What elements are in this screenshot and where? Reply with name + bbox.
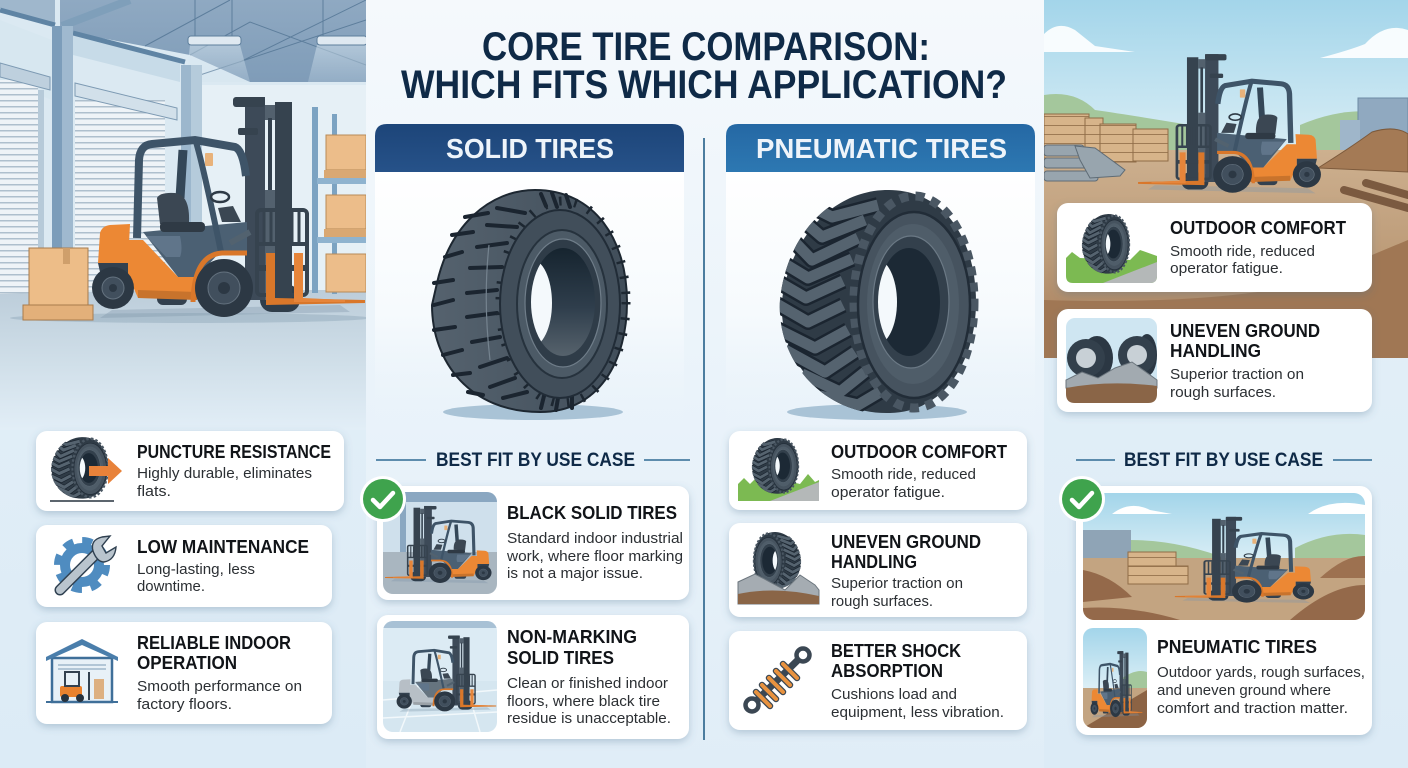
icon: shock absorber	[746, 648, 810, 712]
card: uneven ground handling, scene	[1057, 309, 1372, 412]
warehouse scene with forklift	[0, 0, 370, 430]
panel: pneumatic tires	[726, 124, 1035, 430]
card: low maintenance: downtime.	[137, 578, 205, 595]
icon: tire on rocks	[738, 532, 819, 604]
card: reliable indoor operation: factory floors.	[137, 696, 232, 713]
card: better shock absorption: equipment, less vibration.	[831, 704, 1004, 721]
heading: best fit, pneumatic: BEST FIT BY USE CASE	[1124, 450, 1323, 471]
card: black solid tires: is not a major issue.	[507, 565, 643, 582]
title	[401, 25, 1007, 107]
card: outdoor comfort: Smooth ride, reduced	[831, 466, 976, 483]
cardboard box on pallet	[23, 248, 93, 320]
card: outdoor comfort: operator fatigue.	[831, 484, 945, 501]
heading: pneumatic tires: PNEUMATIC TIRES	[756, 133, 1007, 164]
icon: check badge, pneumatic	[1059, 476, 1105, 522]
card: outdoor comfort	[729, 431, 1027, 510]
card: better shock absorption: Cushions load and	[831, 686, 957, 703]
logs	[1344, 183, 1408, 208]
card: pneumatic tires use case: and uneven ground where	[1157, 682, 1331, 699]
card: pneumatic tires use case: PNEUMATIC TIRES	[1157, 637, 1317, 657]
card: non-marking solid tires: Clean or finished indoor	[507, 675, 668, 692]
card: outdoor comfort, scene: OUTDOOR COMFORT	[1170, 218, 1346, 238]
card: better shock absorption	[729, 631, 1027, 730]
outdoor yard scene with forklift	[1044, 0, 1408, 358]
card: black solid tires	[377, 486, 689, 600]
card: outdoor comfort, scene	[1057, 203, 1372, 292]
card: uneven ground handling: UNEVEN GROUND	[831, 532, 981, 552]
card: black solid tires: Standard indoor industrial	[507, 530, 683, 547]
card: outdoor comfort: OUTDOOR COMFORT	[831, 442, 1007, 462]
card: reliable indoor operation	[36, 622, 332, 724]
heading: solid tires: SOLID TIRES	[446, 133, 614, 164]
card: uneven ground handling: Superior traction on	[831, 575, 963, 592]
card: black solid tires: BLACK SOLID TIRES	[507, 503, 677, 523]
forklift: yard	[1138, 54, 1321, 193]
pneumatic tire illustration	[775, 190, 976, 413]
panel: solid tires	[375, 124, 684, 430]
icon: check badge, solid	[360, 476, 406, 522]
card: uneven ground handling, scene: Superior traction on	[1170, 366, 1304, 383]
card: non-marking solid tires: floors, where black tire	[507, 693, 660, 710]
stacked lumber	[1044, 114, 1168, 162]
card: reliable indoor operation: RELIABLE INDOOR	[137, 633, 291, 653]
card: pneumatic tires use case	[1076, 486, 1372, 735]
card: black solid tires: work, where floor marking	[506, 548, 683, 565]
heading: pneumatic tires	[726, 124, 1035, 172]
icon: wheels on rocks	[1066, 318, 1157, 403]
forklift: warehouse	[92, 97, 365, 318]
solid tire illustration	[432, 190, 627, 412]
icon: warehouse with forklift	[46, 639, 118, 702]
card: non-marking solid tires: NON-MARKING	[507, 627, 637, 647]
thumbnail: forklift on dirt	[1083, 628, 1147, 728]
title: WHICH FITS WHICH APPLICATION?	[401, 63, 1007, 107]
card: pneumatic tires use case: comfort and traction matter.	[1157, 700, 1348, 717]
card: outdoor comfort, scene: operator fatigue.	[1170, 260, 1283, 277]
card: uneven ground handling, scene: UNEVEN GROUND	[1170, 321, 1320, 341]
card: uneven ground handling, scene: rough surfaces.	[1170, 384, 1276, 401]
card: uneven ground handling: rough surfaces.	[831, 593, 933, 610]
card: non-marking solid tires: SOLID TIRES	[507, 648, 614, 668]
card: reliable indoor operation: OPERATION	[137, 653, 237, 673]
card: pneumatic tires use case: Outdoor yards, rough surfaces,	[1157, 664, 1365, 681]
card: outdoor comfort, scene: Smooth ride, reduced	[1170, 243, 1315, 260]
card: puncture resistance: Highly durable, eliminates	[137, 465, 312, 482]
card: uneven ground handling: HANDLING	[831, 552, 917, 572]
card: uneven ground handling, scene: HANDLING	[1170, 341, 1261, 361]
heading: best fit, solid: BEST FIT BY USE CASE	[436, 450, 635, 471]
card: low maintenance: LOW MAINTENANCE	[137, 537, 309, 557]
icon: tire on grass	[1066, 214, 1157, 283]
card: puncture resistance	[36, 431, 344, 511]
icon: gear and wrench	[58, 536, 116, 590]
card: reliable indoor operation: Smooth performance on	[137, 678, 302, 695]
thumbnail: clean-floor forklift	[383, 621, 497, 732]
dirt mound	[1318, 129, 1408, 172]
heading: solid tires	[375, 124, 684, 172]
stacked rocks	[1044, 145, 1125, 181]
card: non-marking solid tires	[377, 615, 689, 739]
icon: tire with arrow	[50, 437, 122, 501]
card: better shock absorption: ABSORPTION	[831, 661, 943, 681]
card: non-marking solid tires: residue is unacceptable.	[507, 710, 671, 727]
card: uneven ground handling	[729, 523, 1027, 617]
title: CORE TIRE COMPARISON:	[482, 25, 930, 69]
card: puncture resistance: flats.	[137, 483, 171, 500]
card: better shock absorption: BETTER SHOCK	[831, 641, 961, 661]
illustration: outdoor yard forklift	[1083, 493, 1365, 620]
icon: tire on grass	[738, 438, 819, 501]
card: low maintenance	[36, 525, 332, 607]
card: puncture resistance: PUNCTURE RESISTANCE	[137, 442, 331, 462]
warehouse shelving with boxes	[312, 107, 366, 294]
thumbnail: indoor forklift	[383, 492, 497, 594]
card: low maintenance: Long-lasting, less	[137, 561, 255, 578]
